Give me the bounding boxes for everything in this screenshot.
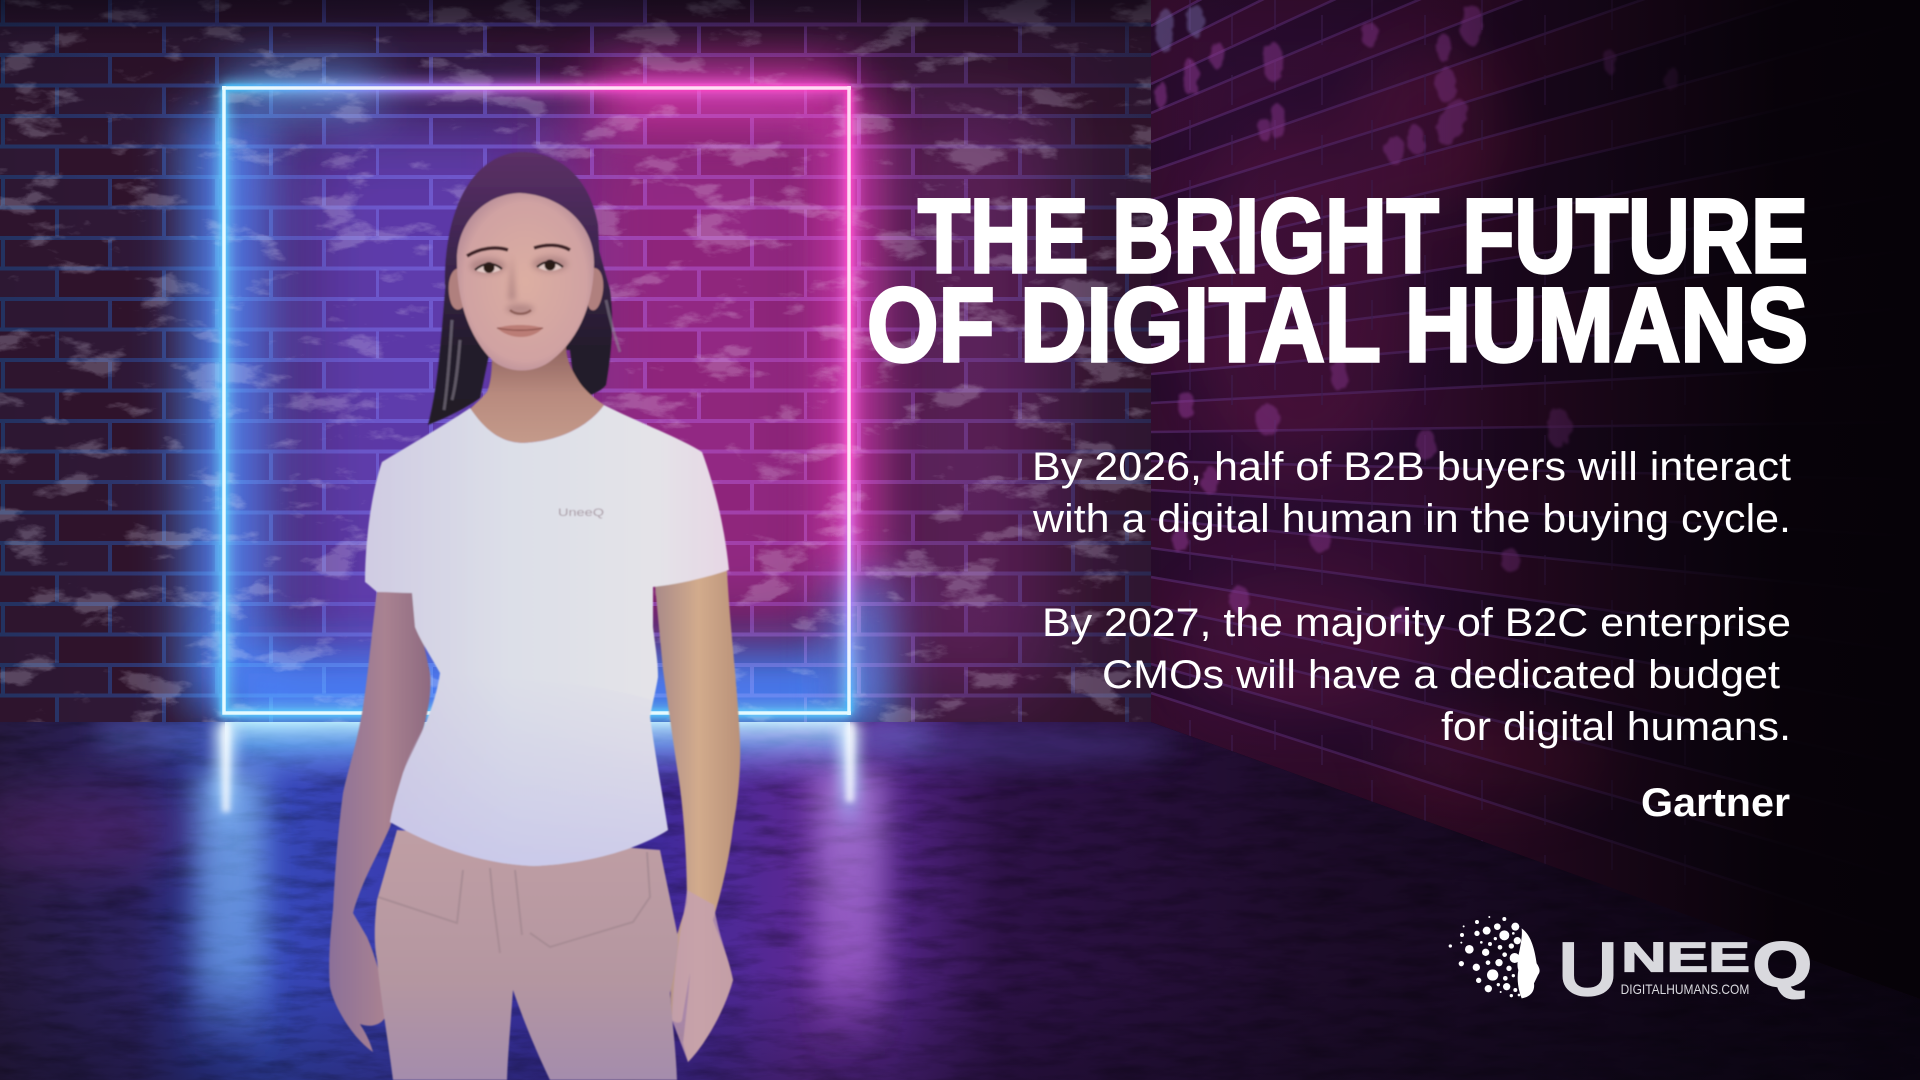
facial features — [467, 245, 570, 337]
neck — [470, 345, 604, 443]
weathered brick patches — [1155, 5, 1678, 634]
title: OF DIGITAL HUMANS — [867, 267, 1808, 384]
wordmark: Q — [1753, 930, 1812, 1000]
shirt lower shading — [390, 673, 668, 866]
wordmark: U — [1558, 929, 1618, 1011]
left arm — [329, 590, 431, 1052]
white t-shirt — [365, 405, 729, 866]
statistic 2026: with a digital human in the buying cycle. — [1032, 497, 1791, 541]
ears — [449, 268, 603, 310]
logo tagline: DIGITALHUMANS.COM — [1621, 981, 1749, 997]
statistic 2026: By 2026, half of B2B buyers will interact — [1032, 445, 1791, 489]
concrete floor — [0, 722, 1660, 1080]
icon: dotted head — [1449, 916, 1540, 998]
trousers — [375, 830, 678, 1080]
red brick tint — [1180, 40, 1620, 810]
neon tube — [222, 86, 851, 715]
statistic 2027: CMOs will have a dedicated budget — [1102, 653, 1780, 697]
right hand tint — [672, 890, 733, 1062]
face — [457, 193, 594, 370]
source: Gartner: Gartner — [1641, 781, 1790, 825]
purple-lit wash — [1151, 0, 1451, 760]
left brick wall — [0, 0, 1151, 735]
neon glow — [224, 88, 849, 713]
right brick wall — [1151, 0, 1717, 912]
statistic 2027 — [1042, 601, 1791, 749]
back hair — [428, 240, 612, 425]
shirt logo: UneeQ — [558, 507, 605, 519]
wordmark: NEE — [1621, 935, 1750, 981]
title — [867, 178, 1808, 384]
hair cap — [445, 152, 601, 295]
trouser pockets and fly — [378, 852, 650, 953]
neon rectangle frame — [222, 86, 851, 715]
alternating brick rows — [1151, 0, 1555, 867]
right arm — [655, 570, 740, 1062]
digital human figure — [329, 152, 740, 1080]
UneeQ logo — [1449, 916, 1812, 1011]
mortar lines — [1151, 0, 1719, 876]
hair highlights — [444, 300, 620, 410]
statistic 2026 — [1032, 445, 1791, 541]
wordmark — [1558, 929, 1812, 1011]
statistics text block — [1032, 445, 1791, 749]
statistic 2027: By 2027, the majority of B2C enterprise — [1042, 601, 1791, 645]
statistic 2027: for digital humans. — [1441, 705, 1791, 749]
